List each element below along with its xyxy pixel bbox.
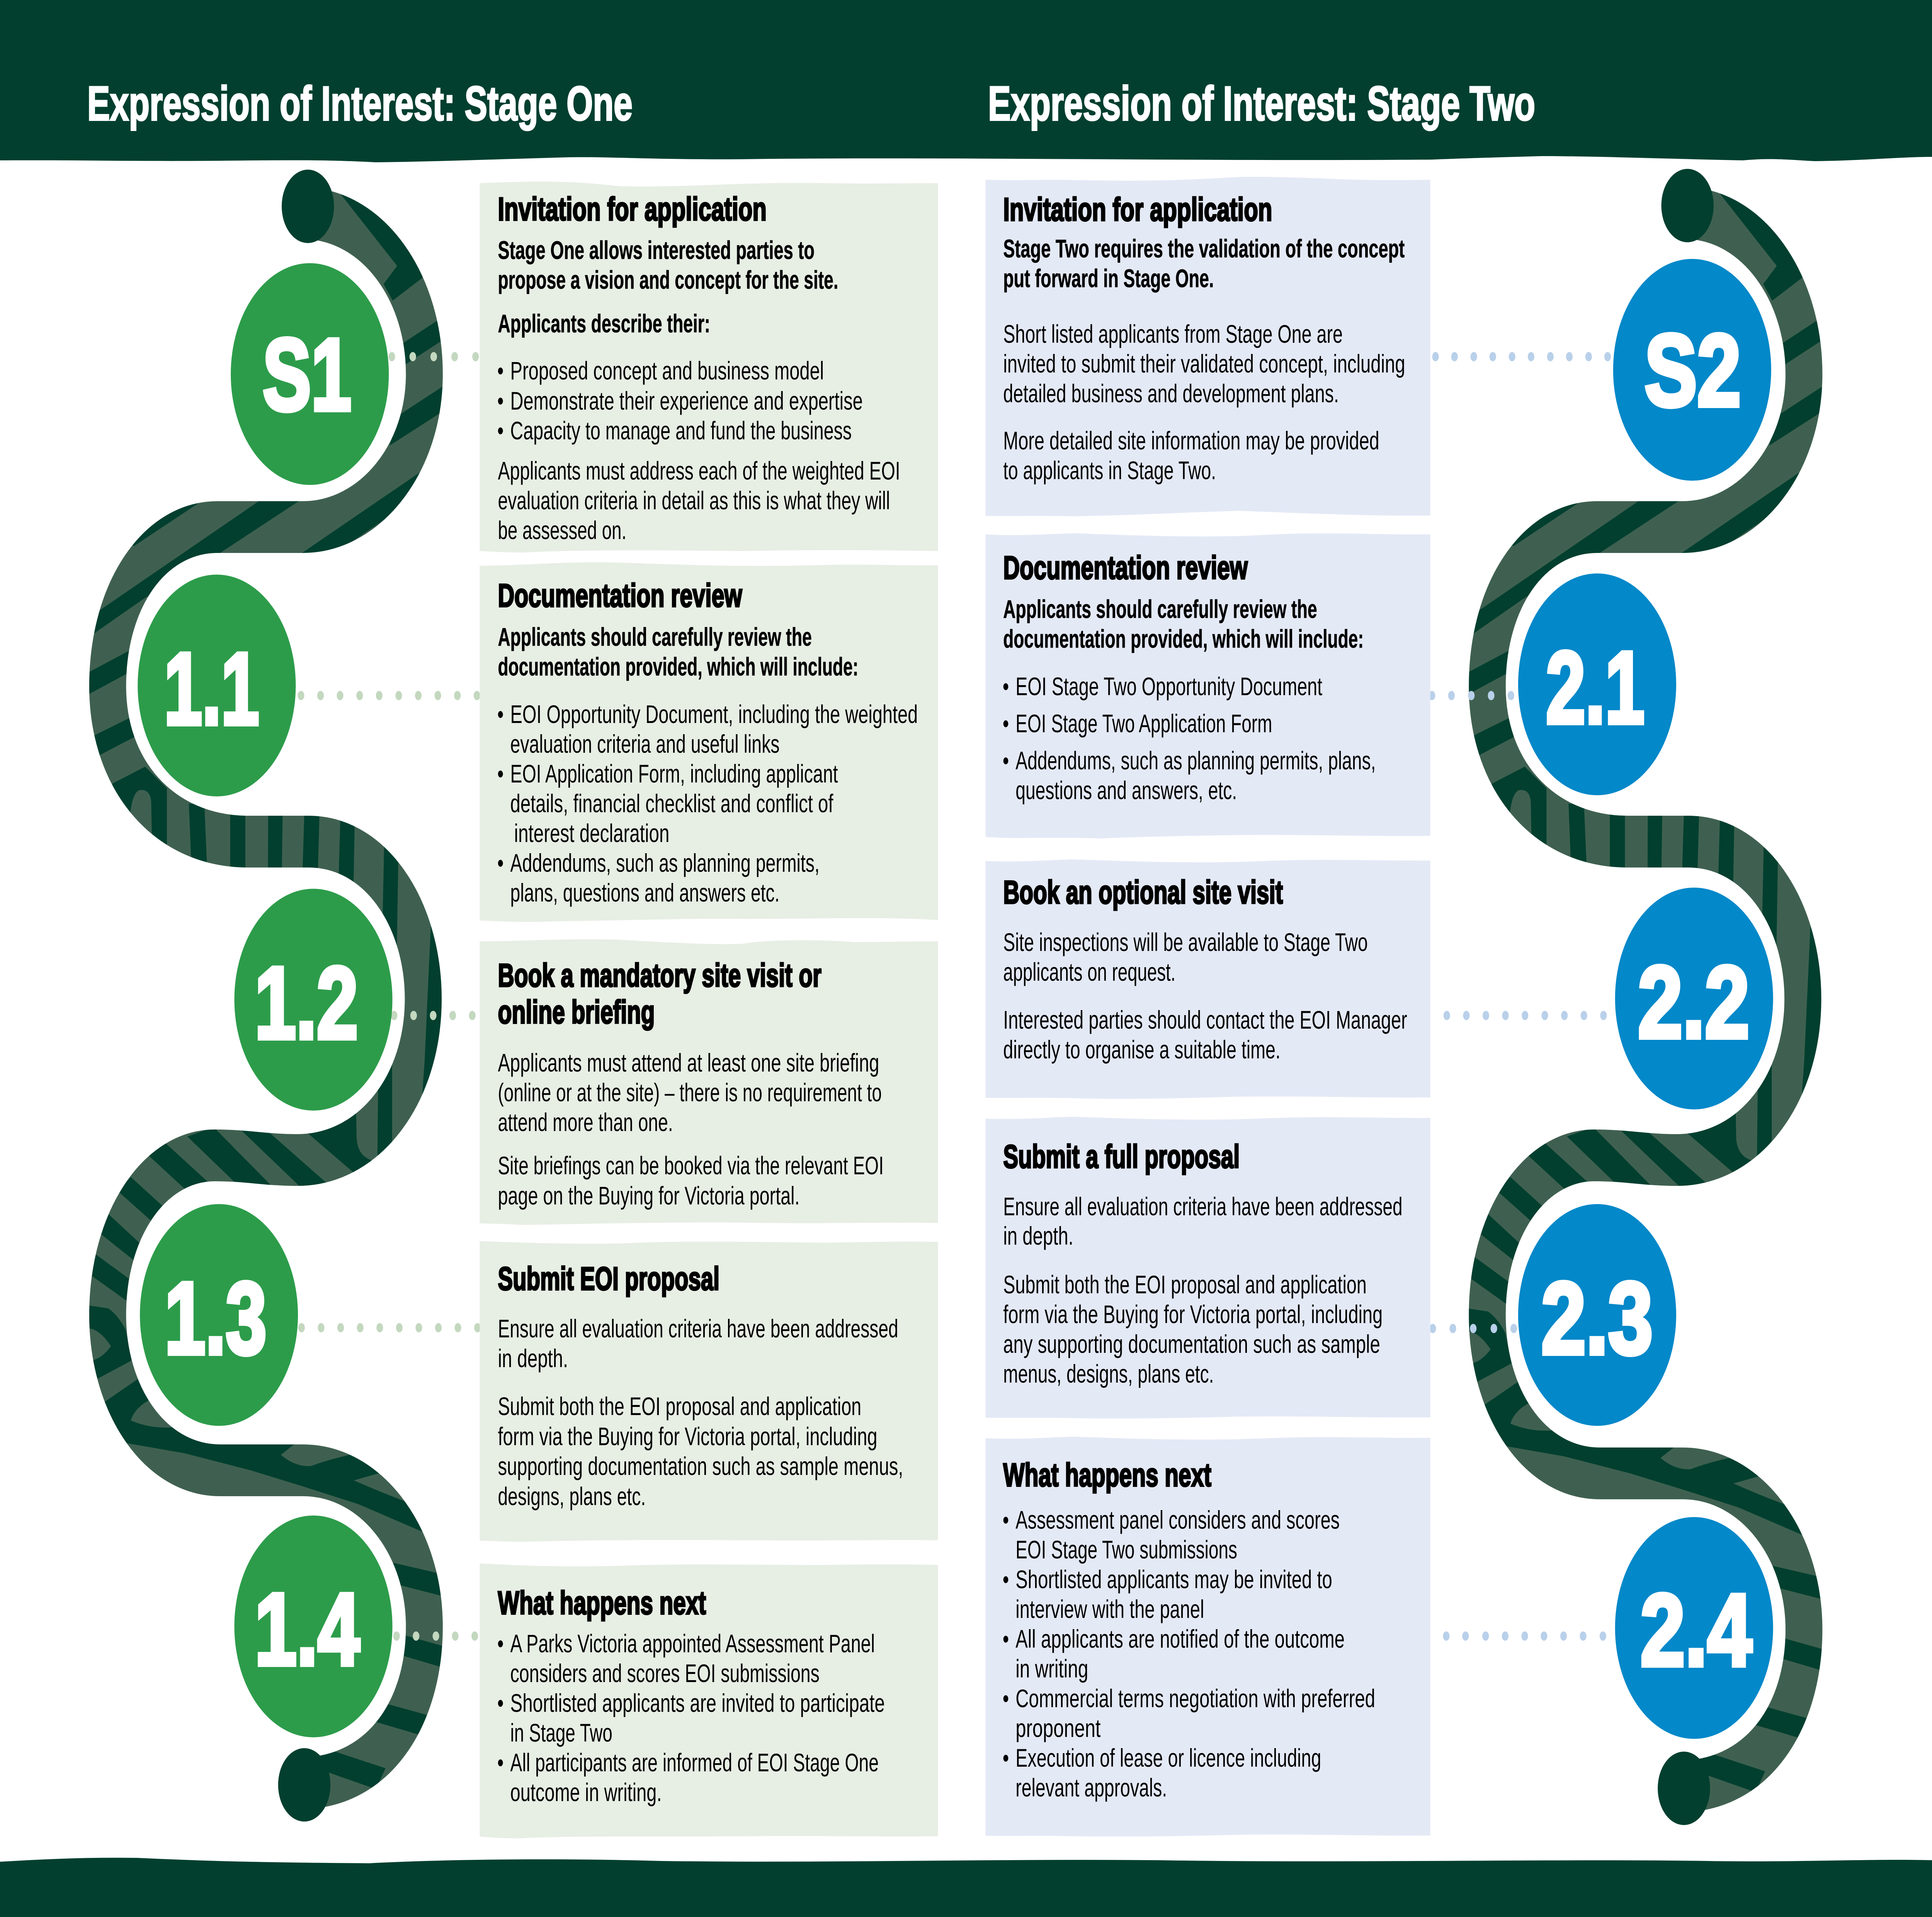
panel: 1.3 submit EOI proposal [480,1241,938,1542]
bullet list: • [497,1689,504,1718]
step badge 1.1: 1.1 [164,631,259,746]
closing text: be assessed on. [498,516,626,545]
body text: Ensure all evaluation criteria have been addressed [1003,1192,1403,1221]
body text [1003,928,1407,1064]
dotted connectors: stage two [1429,352,1611,1641]
bullet list: All participants are informed of EOI Stage One [510,1749,879,1777]
closing text: evaluation criteria in detail as this is what they will [498,486,890,515]
step badge 2.2 [1615,888,1773,1109]
intro text [1003,235,1405,293]
bullet list: • [497,849,504,878]
body text: any supporting documentation such as sample [1003,1330,1380,1359]
bullet list: • [497,1749,504,1777]
title: stage two: Expression of Interest: Stage Two [988,77,1535,130]
panel: S1 invitation for application [480,182,938,553]
heading: Invitation for application [1003,192,1272,228]
intro text: put forward in Stage One. [1003,264,1214,293]
bullet list: Execution of lease or licence including [1015,1744,1321,1772]
bullet list: Addendums, such as planning permits, plans, [1015,747,1376,775]
ribbon start cap: stage one [282,170,334,243]
bullet list: • [497,417,504,445]
heading: What happens next [1003,1457,1211,1493]
body text: Submit both the EOI proposal and application [498,1392,861,1421]
bullet list [1003,1506,1375,1802]
bullet list: A Parks Victoria appointed Assessment Panel [510,1630,875,1658]
bullet list: Addendums, such as planning permits, [510,849,820,878]
bullet list: questions and answers, etc. [1015,776,1237,805]
bullet list: • [1003,1506,1009,1534]
step badge 1.1 [138,575,296,796]
bullet list: • [497,700,504,729]
body text: to applicants in Stage Two. [1003,456,1216,485]
bullet list: relevant approvals. [1015,1774,1167,1802]
bullet list: considers and scores EOI submissions [510,1659,820,1688]
bullet list: • [1003,709,1009,738]
body text: form via the Buying for Victoria portal, including [498,1422,878,1451]
intro text [1003,595,1364,653]
heading: Invitation for application [498,191,767,227]
body text: attend more than one. [498,1108,673,1137]
heading: Submit EOI proposal [498,1261,719,1297]
bullet list: evaluation criteria and useful links [510,730,780,759]
bullet list: interview with the panel [1015,1595,1204,1624]
panel: 2.4 what happens next [986,1437,1430,1837]
body text: Site briefings can be booked via the relevant EOI [498,1152,884,1180]
bullet list: Shortlisted applicants are invited to participate [510,1689,885,1718]
bullet list: EOI Opportunity Document, including the weighted [510,700,918,729]
bullet list: Shortlisted applicants may be invited to [1015,1565,1332,1594]
intro text: Stage One allows interested parties to [498,236,815,265]
panel: 1.2 book a mandatory site visit [480,939,938,1225]
bullet list: Commercial terms negotiation with preferred [1015,1684,1375,1713]
heading: online briefing [498,994,655,1030]
step badge 2.1: 2.1 [1546,630,1645,745]
heading: Book a mandatory site visit or [498,958,821,993]
bullet list: EOI Stage Two Opportunity Document [1015,672,1322,701]
body text: Interested parties should contact the EOI Manager [1003,1006,1407,1034]
body text: (online or at the site) – there is no requirement to [498,1078,882,1107]
step badge 2.3: 2.3 [1541,1261,1653,1375]
intro text: Applicants describe their: [498,310,710,338]
bullet list: Proposed concept and business model [510,357,824,385]
body text: invited to submit their validated concept, including [1003,350,1405,378]
bullet list [497,1630,885,1807]
closing text [498,457,900,545]
ribbon end cap: stage two [1658,1752,1710,1825]
header band [0,0,1932,162]
bullet list: • [1003,1744,1009,1772]
panel: 2.1 documentation review [986,533,1430,839]
step badge 2.4: 2.4 [1640,1573,1752,1687]
bullet list: EOI Stage Two submissions [1015,1536,1237,1564]
ribbon start cap: stage two [1661,169,1714,242]
panel: 2.3 submit a full proposal [986,1117,1430,1419]
body text: More detailed site information may be provided [1003,427,1379,455]
bullet list: outcome in writing. [510,1778,662,1807]
body text: directly to organise a suitable time. [1003,1036,1281,1064]
bullet list: details, financial checklist and conflict of [510,789,833,818]
body text: Submit both the EOI proposal and application [1003,1271,1367,1299]
step badge 1.2 [234,889,393,1111]
step badge 2.4 [1615,1517,1773,1739]
bullet list: EOI Application Form, including applicant [510,760,838,788]
intro text: Applicants should carefully review the [1003,595,1317,624]
body text: detailed business and development plans. [1003,379,1339,408]
ribbon path: stage two [1469,191,1822,1810]
step badge S1: S1 [263,317,351,432]
body text [1003,1192,1403,1388]
step badge 1.4: 1.4 [255,1572,360,1686]
bullet list [497,357,863,445]
body text: Short listed applicants from Stage One are [1003,320,1343,349]
bullet list: Capacity to manage and fund the business [510,417,852,445]
closing text: Applicants must address each of the weighted EOI [498,457,900,485]
step badge S2: S2 [1645,313,1741,427]
heading: Documentation review [1003,550,1248,586]
heading [498,958,821,1030]
intro text: documentation provided, which will include: [498,653,858,681]
panel: 1.1 documentation review [480,562,938,922]
heading: Documentation review [498,578,742,614]
bullet list: • [1003,672,1009,701]
title: stage one: Expression of Interest: Stage One [87,77,633,130]
step badge 2.3 [1518,1204,1676,1426]
step badge 1.3 [140,1204,298,1426]
step badge 2.2: 2.2 [1638,945,1750,1059]
step badge 1.3: 1.3 [165,1261,267,1375]
bullet list: plans, questions and answers etc. [510,879,780,907]
bullet list [497,700,918,907]
body text: menus, designs, plans etc. [1003,1360,1214,1388]
bullet list: • [497,357,504,385]
bullet list: proponent [1015,1714,1101,1743]
body text: Applicants must attend at least one site briefing [498,1049,879,1077]
body text: designs, plans etc. [498,1482,646,1511]
body text [1003,320,1405,485]
bullet list [1003,672,1376,805]
intro text [498,623,858,681]
body text: applicants on request. [1003,958,1175,987]
intro text: propose a vision and concept for the site. [498,266,838,294]
ribbon path: stage one [89,191,443,1807]
bullet list: Demonstrate their experience and expertise [510,387,863,415]
body text [498,1315,903,1511]
intro text: documentation provided, which will include: [1003,625,1364,653]
bullet list: • [497,760,504,788]
step badge 1.2: 1.2 [255,946,358,1060]
bullet list: in writing [1015,1655,1088,1683]
bullet list: in Stage Two [510,1719,612,1747]
bullet list: • [1003,1625,1009,1653]
heading: What happens next [498,1585,706,1621]
bullet list: • [1003,747,1009,775]
bullet list: All applicants are notified of the outcome [1015,1625,1345,1653]
footer band [0,1858,1932,1917]
panel: 1.4 what happens next [480,1563,938,1838]
body text: page on the Buying for Victoria portal. [498,1182,800,1210]
bullet list: Assessment panel considers and scores [1015,1506,1340,1534]
body text: in depth. [498,1344,568,1373]
panel: 2.2 book an optional site visit [986,859,1430,1099]
bullet list: • [1003,1565,1009,1594]
bullet list: interest declaration [514,819,669,848]
step badge S1 [231,263,389,485]
body text [498,1049,884,1210]
heading: Book an optional site visit [1003,874,1283,910]
intro text [498,236,838,338]
body text: Site inspections will be available to Stage Two [1003,928,1368,957]
body text: in depth. [1003,1222,1073,1250]
intro text: Applicants should carefully review the [498,623,812,651]
bullet list: • [497,1630,504,1658]
body text: form via the Buying for Victoria portal, including [1003,1300,1383,1329]
bullet list: • [1003,1684,1009,1713]
step badge 1.4 [234,1516,393,1737]
step badge 2.1 [1518,573,1676,795]
body text: supporting documentation such as sample menus, [498,1452,903,1481]
step badge S2 [1613,259,1771,481]
heading: Submit a full proposal [1003,1139,1240,1175]
dotted connectors: stage one [298,352,481,1641]
intro text: Stage Two requires the validation of the concept [1003,235,1405,263]
bullet list: EOI Stage Two Application Form [1015,709,1272,738]
bullet list: • [497,387,504,415]
ribbon end cap: stage one [278,1748,330,1822]
body text: Ensure all evaluation criteria have been addressed [498,1315,898,1343]
panel: S2 invitation for application [986,177,1430,516]
